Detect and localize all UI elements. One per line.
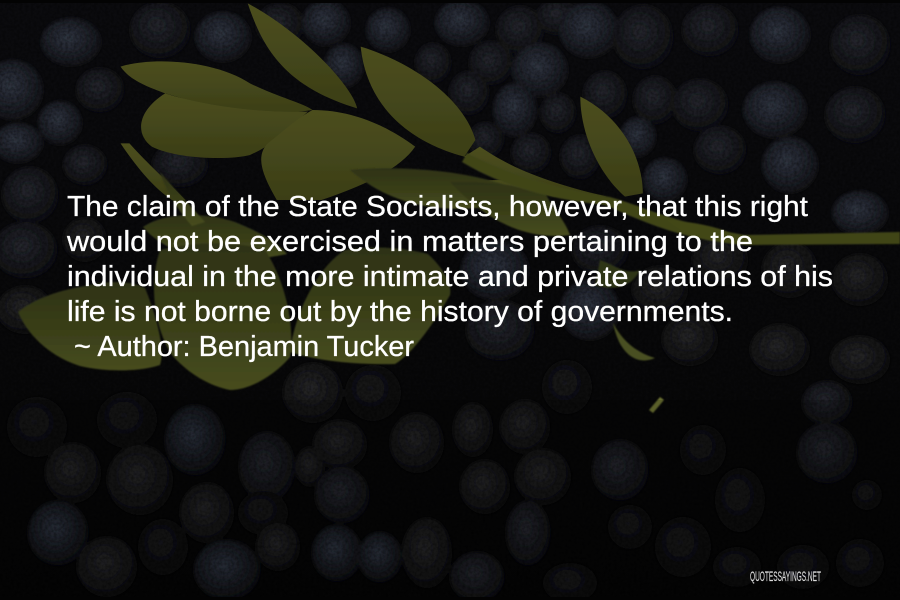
stem and small leaves: right branch: [462, 153, 900, 413]
quote text: would not be exercised in matters pertaining to the: [66, 226, 753, 258]
infographic canvas: QUOTESSAYINGS.NET: [750, 568, 821, 584]
bottom vignette: [0, 400, 900, 600]
blueberries: lower field: [7, 360, 884, 600]
quote text: life is not borne out by the history of governments.: [67, 296, 733, 328]
quote text: [66, 191, 833, 328]
leaves: upper sprig: [121, 3, 643, 200]
bottom edge band: [0, 597, 900, 600]
author attribution: ~ Author: Benjamin Tucker: [74, 331, 414, 363]
leaves: lower cluster: [18, 168, 570, 390]
blueberries: upper field: [0, 0, 890, 384]
quote text: individual in the more intimate and private relations of his: [67, 261, 833, 293]
quote text: The claim of the State Socialists, however, that this right: [67, 191, 808, 223]
top edge band: [0, 0, 900, 3]
